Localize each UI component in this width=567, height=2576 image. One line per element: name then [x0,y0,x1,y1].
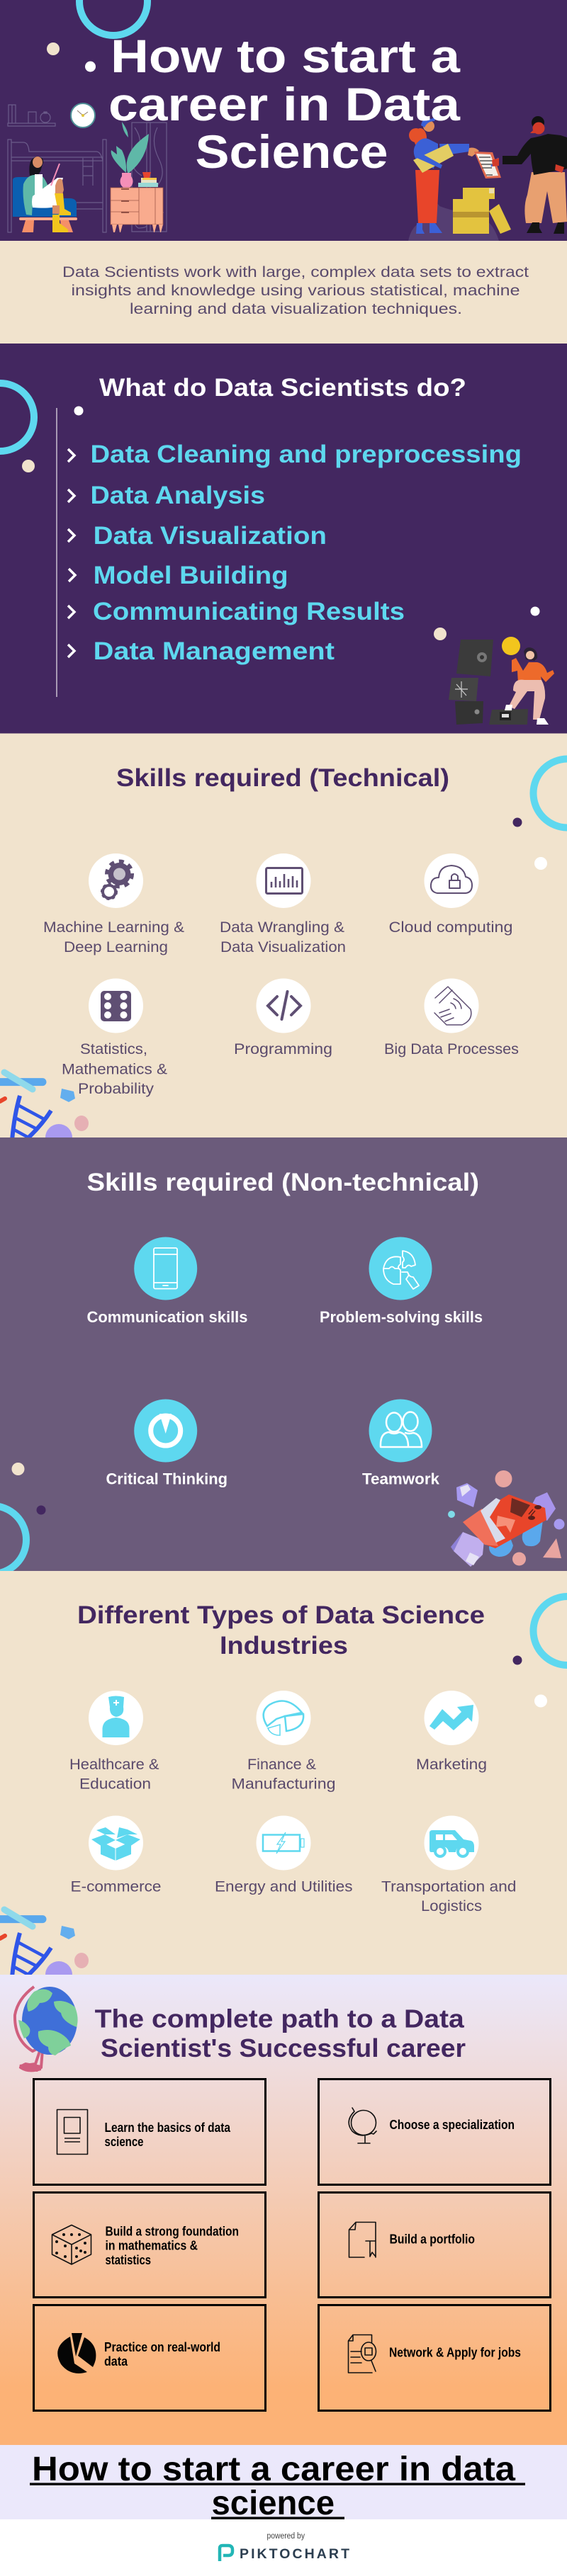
step: practice on real-world data: Practice on real-world [104,2340,220,2354]
skill: data wrangling: Data Wrangling & [220,919,344,936]
logo mark [220,2546,232,2561]
heading: What do Data Scientists do? [99,374,466,402]
industry: transportation: Transportation and [381,1878,516,1895]
industry: e-commerce [71,1816,162,1895]
illustration: parcels [448,1470,564,1567]
step: network and apply [319,2305,550,2411]
industry: transportation: Logistics [421,1897,482,1914]
DNA decoration [0,1072,89,1151]
step: learn the basics [34,2079,265,2184]
woman figure [23,157,71,232]
chevrons [68,449,75,657]
skill: communication [86,1237,248,1326]
heading: Industries [220,1632,348,1659]
industry: finance: Manufacturing [231,1775,336,1792]
dark dot [513,817,522,827]
white dot [530,606,540,616]
industry: transportation [381,1816,516,1914]
illustration: globe [15,1987,78,2072]
step: choose a specialization: Choose a specialization [390,2118,515,2132]
white dot [74,407,84,415]
title: career in Data [108,78,461,130]
industry: marketing: Marketing [416,1756,487,1773]
decorative ring [533,1596,567,1665]
panel: title header [0,0,567,241]
illustration: woman on safes [449,637,554,725]
panel: career path [0,1975,567,2445]
books and cup [138,172,158,187]
powered by label: powered by [266,2532,305,2541]
step: learn the basics: science [105,2135,143,2149]
illustration: woman reading in room [8,103,167,232]
panel: non-technical skills [0,1137,567,1574]
armchair [13,177,77,232]
step: choose a specialization [319,2079,550,2184]
skill: statistics [62,979,167,1097]
step: network and apply: Network & Apply for jobs [389,2346,521,2360]
plant in vase [111,122,149,188]
step: build a foundation: in mathematics & [105,2239,198,2253]
list of activities [68,441,522,665]
skill: machine learning [43,853,184,955]
cabinet [111,188,163,232]
list items: Data Visualization [94,522,327,550]
intro text: learning and data visualization techniques. [130,301,462,317]
industry: healthcare: Education [79,1775,151,1792]
skill: teamwork: Teamwork [362,1470,440,1487]
skill: problem solving [320,1237,483,1326]
dark dot [37,1506,45,1514]
industry: energy: Energy and Utilities [215,1878,353,1895]
list items: Model Building [94,562,288,589]
skill: programming: Programming [234,1040,332,1057]
skill: teamwork [362,1400,440,1487]
panel: industries [0,1571,567,1988]
industry: finance [231,1691,336,1792]
skill: big data [384,979,519,1057]
heading [95,2004,466,2062]
panel: introduction [0,241,567,344]
skill: critical thinking [106,1400,228,1487]
white dot [534,1694,547,1707]
step: build a foundation: statistics [105,2253,151,2267]
skill: critical thinking: Critical Thinking [106,1470,228,1487]
faint background blob [408,203,499,241]
industry: e-commerce: E-commerce [71,1878,162,1895]
decorative ring top [79,0,147,35]
skill: machine learning: Machine Learning & [43,919,184,936]
heading: Scientist's Successful career [101,2033,466,2062]
footer title text [32,2451,515,2522]
intro text [62,264,529,317]
industry: finance: Finance & [247,1756,316,1773]
clipboard [474,152,501,178]
beige dot [22,460,35,472]
heading: The complete path to a Data [95,2004,465,2033]
skill: statistics: Statistics, [80,1040,147,1057]
skill: big data: Big Data Processes [384,1040,519,1057]
skill: machine learning: Deep Learning [64,938,168,955]
skill: data wrangling [220,853,346,955]
step: learn the basics: Learn the basics of data [105,2121,231,2135]
skill: cloud computing [388,853,513,936]
skill: statistics: Mathematics & [62,1061,167,1078]
step: build a foundation [34,2193,265,2298]
heading: Skills required (Non-technical) [86,1169,479,1196]
intro text: Data Scientists work with large, complex data sets to extract [62,264,529,280]
list items: Data Management [94,637,335,665]
industry: energy [215,1816,353,1895]
step: build a foundation: Build a strong foundation [105,2225,239,2239]
industry: healthcare: Healthcare & [69,1756,159,1773]
logo wordmark: PIKTOCHART [240,2546,349,2562]
list items: Data Analysis [91,482,265,509]
footer title text: science [211,2485,335,2522]
beige dot [434,628,447,640]
industry: marketing [416,1691,487,1773]
list items [91,441,522,665]
step: build a portfolio [319,2193,550,2298]
skill: communication: Communication skills [86,1308,248,1326]
panel: powered by branding [0,2519,567,2576]
decorative ring [0,1506,26,1574]
title [108,30,461,178]
skill: programming [234,979,332,1057]
skill: statistics: Probability [78,1080,154,1097]
woman [502,637,554,725]
intro text: insights and knowledge using various statistical, machine [71,283,520,299]
person one [409,117,479,234]
panel: footer title [0,2445,567,2522]
panel: what do data scientists do [0,344,567,734]
illustration: two people with boxes [408,116,567,241]
heading: Skills required (Technical) [116,764,449,792]
decorative ring [533,759,567,827]
list items: Data Cleaning and preprocessing [91,441,522,468]
title: How to start a [111,30,461,82]
DNA decoration [0,1910,89,1988]
step: practice on real-world data [34,2305,265,2411]
industry: healthcare [69,1691,159,1792]
list items: Communicating Results [93,598,405,625]
wall clock [71,103,95,127]
white dot [534,857,547,870]
vertical rule [56,408,57,697]
beige dot [47,42,60,55]
skill: data wrangling: Data Visualization [220,938,346,955]
panel: technical skills [0,734,567,1151]
step: build a portfolio: Build a portfolio [390,2232,475,2247]
step: practice on real-world data: data [104,2354,128,2368]
decorative ring left [0,383,34,451]
dark dot [513,1656,522,1664]
skill: problem solving: Problem-solving skills [320,1308,483,1326]
beige dot [11,1463,24,1475]
stacked boxes [453,188,511,234]
heading: Different Types of Data Science [77,1601,485,1629]
white dot [85,61,96,72]
footer title text: How to start a career in data [32,2451,515,2488]
title: Science [196,125,388,178]
person two [492,116,567,234]
skill: cloud computing: Cloud computing [388,919,513,936]
heading [77,1601,485,1659]
